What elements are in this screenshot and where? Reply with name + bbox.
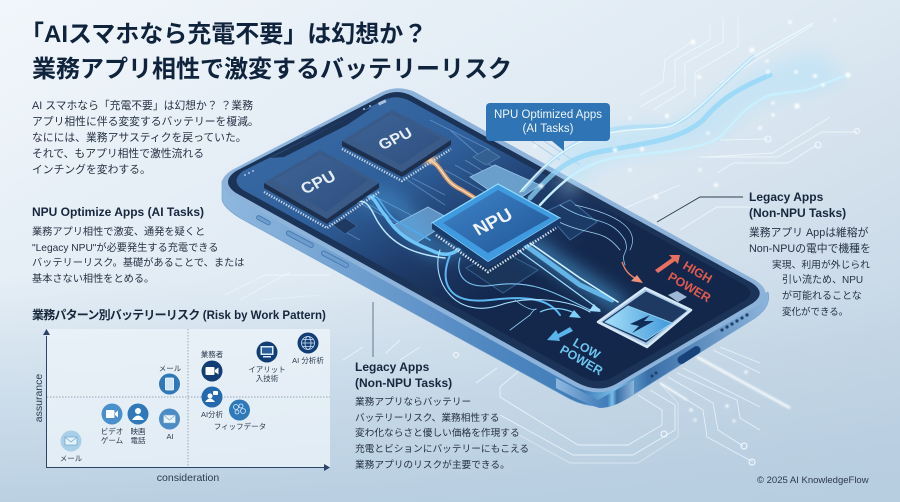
phone body	[222, 88, 769, 406]
callout box	[486, 103, 610, 141]
chip: CPU: CPU	[298, 168, 339, 198]
plot area	[47, 329, 330, 467]
particles	[534, 19, 851, 422]
section: NPU Optimize Apps	[32, 205, 244, 285]
section body: バッテリーリスク。基礎があることで、または	[32, 258, 244, 269]
body text: 引い流ため、NPU	[782, 275, 863, 286]
body text: 実現、利用が外じられ	[772, 260, 870, 271]
body text: バッテリーリスク、業務相性する	[355, 413, 499, 424]
body text: 業務アプリならバッテリー	[355, 397, 471, 408]
phone notch bar	[270, 108, 372, 158]
icon: mail	[159, 408, 180, 430]
high power indicator	[622, 255, 714, 305]
orange stream	[425, 158, 478, 200]
high power indicator: POWER	[665, 269, 713, 305]
heading: (Non-NPU Tasks)	[749, 206, 846, 220]
section body: 業務アプリ相性で激変、通発を疑くと	[32, 227, 205, 238]
chart: risk by work pattern	[33, 329, 330, 484]
chart item labels: メール	[60, 454, 83, 463]
icon: video	[102, 404, 122, 424]
title: 業務アプリ相性で激変するバッテリーリスク	[32, 56, 512, 83]
chart item labels: ビデオ	[101, 426, 123, 436]
callout pointer	[552, 141, 564, 151]
NPU to battery stream	[525, 245, 612, 300]
section: Legacy Apps bottom	[355, 360, 529, 471]
heading	[749, 190, 846, 220]
chart item labels: イアリット	[248, 365, 286, 374]
phone top rim	[222, 88, 766, 392]
chart item labels: 業務者	[201, 349, 224, 359]
low power indicator: POWER	[557, 342, 605, 378]
section body: 基本さない相性をとめる。	[32, 274, 154, 285]
chart item labels	[60, 349, 324, 463]
chart heading: 業務パターン別バッテリーリスク (Risk by Work Pattern)	[32, 308, 326, 322]
icon: people	[202, 386, 222, 408]
glow at port	[660, 357, 790, 408]
chip: NPU: NPU	[469, 204, 516, 239]
body text: 業務アプリのリスクが主要できる。	[355, 460, 510, 471]
chart item labels: AI分析	[201, 409, 224, 419]
chart item labels: 電話	[130, 435, 146, 445]
CPU to NPU stream	[358, 195, 470, 254]
chip: CPU	[264, 150, 379, 228]
title	[20, 21, 512, 83]
icon: dark video	[202, 360, 222, 382]
body text	[355, 396, 529, 471]
chip: GPU	[342, 110, 451, 181]
section: Legacy Apps right	[749, 190, 871, 318]
body text: 変わ化ならさと優しい価格を作現する	[355, 428, 520, 439]
device details: port and speaker	[556, 313, 749, 408]
intro text	[32, 100, 259, 176]
body text: 変化ができる。	[782, 307, 848, 318]
section body: "Legacy NPU"が必要発生する充電できる	[32, 243, 218, 254]
axes	[43, 329, 330, 471]
chart item labels: AI 分析析	[292, 355, 324, 365]
glow halo	[370, 50, 850, 305]
title: 「AIスマホなら充電不要」は幻想か？	[20, 21, 427, 48]
phone dark bezel	[228, 92, 760, 389]
AI stream from NPU	[520, 23, 847, 205]
small chips on screen	[333, 149, 597, 293]
icon: person	[128, 404, 148, 424]
chart item labels: メール	[159, 364, 182, 373]
heading: Legacy Apps	[355, 360, 429, 374]
phone speaker slit	[303, 128, 320, 137]
side buttons	[256, 215, 349, 268]
chart item labels: ゲーム	[101, 436, 123, 445]
low power indicator: LOW	[570, 335, 603, 362]
chart item labels: 映画	[130, 426, 146, 436]
lower swirl	[446, 255, 560, 315]
icon: phone	[159, 374, 180, 394]
intro text: インチングを変わする。	[32, 164, 151, 176]
body text: 充電とビションにバッテリーにもこえる	[355, 444, 529, 455]
chip: GPU: GPU	[376, 125, 416, 154]
callout: NPU Optimized Apps	[486, 103, 610, 151]
copyright: © 2025 AI KnowledgeFlow	[757, 475, 869, 486]
x axis label: consideration	[157, 472, 219, 484]
icon: globe	[298, 332, 318, 354]
circuit lines background right and bottom	[225, 17, 857, 463]
low power indicator	[540, 304, 605, 378]
upper right thin swirl	[560, 205, 626, 265]
body text: 業務アプリ Appは維穃が	[749, 227, 868, 239]
section body	[32, 226, 244, 285]
body text: Non-NPUの電中で機種を	[749, 243, 871, 255]
leader lines	[373, 197, 743, 357]
high power indicator: HIGH	[680, 258, 714, 286]
blue data streams	[352, 23, 850, 330]
heading	[355, 360, 452, 390]
callout box: (AI Tasks)	[523, 123, 573, 135]
screen circuit traces	[300, 120, 580, 240]
y axis label: assurance	[33, 374, 45, 422]
chart item labels: 入技術	[256, 373, 279, 383]
icon: mail light	[60, 430, 82, 452]
chip: NPU	[432, 184, 560, 272]
heading: Legacy Apps	[749, 190, 823, 204]
chart item labels: AI	[166, 432, 174, 441]
section heading: NPU Optimize Apps (AI Tasks)	[32, 205, 204, 219]
chart item labels: フィッフデータ	[214, 421, 266, 431]
phone screen	[236, 97, 750, 381]
callout box: NPU Optimized Apps	[494, 109, 602, 121]
battery icon	[598, 288, 691, 347]
phone side	[222, 181, 769, 406]
icon: brain	[229, 400, 250, 420]
intro text: AI スマホなら「充電不要」は幻想か？ ？業務	[32, 100, 253, 112]
intro text: なにには、業務アサスティクを戻っていた。	[32, 132, 247, 144]
body text	[749, 226, 871, 318]
intro text: アプリ相性に伴る変変するバッテリーを榎減。	[32, 116, 259, 128]
icon: monitor	[256, 342, 278, 362]
status icons	[244, 99, 386, 176]
body text: が可能れることな	[782, 291, 862, 302]
heading: (Non-NPU Tasks)	[355, 376, 452, 390]
intro text: それで、もアプリ相性で激性流れる	[32, 148, 204, 160]
